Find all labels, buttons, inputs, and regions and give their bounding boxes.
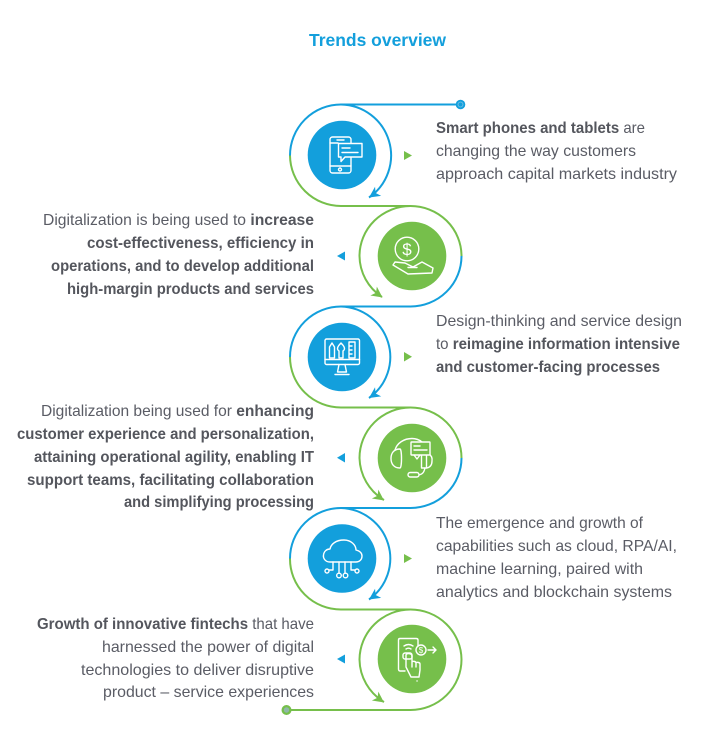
icon: monitor with design tools [308,323,376,391]
start dot [456,100,465,109]
text: digitalization for customer experience [17,403,314,511]
text: smart phones and tablets: Smart phones and tablets are [436,120,645,137]
icon: phone with tap gesture and coin [378,625,446,693]
text: growth of innovative fintechs [37,616,314,701]
text: emergence of capabilities: analytics and blockchain systems [436,584,672,601]
text: digitalization for cost-effectiveness: cost-effectiveness, efficiency in [87,235,314,252]
icon: phone with tap gesture and coin: $ [419,646,424,655]
arrowheads on the flow line [366,187,387,707]
text: design-thinking and service design: to reimagine information intensive [436,336,680,353]
text: smart phones and tablets: changing the way customers [436,143,636,160]
text: digitalization for cost-effectiveness: high-margin products and services [67,281,314,298]
pointer triangles [337,151,412,664]
title: Trends overview [309,30,446,50]
text: design-thinking and service design: Design-thinking and service design [436,313,682,330]
text: digitalization for customer experience: Digitalization being used for enhancing [41,403,314,420]
flow line: serpentine connector [286,104,462,710]
icon: headset with message card [378,424,446,492]
text: design-thinking and service design [436,313,682,376]
end dot [282,705,292,715]
text: emergence of capabilities: capabilities such as cloud, RPA/AI, [436,538,677,555]
text: design-thinking and service design: and customer-facing processes [436,359,660,376]
text: digitalization for customer experience: and simplifying processing [124,494,314,511]
text: emergence of capabilities: machine learning, paired with [436,561,643,578]
text: digitalization for cost-effectiveness: Digitalization is being used to increase [43,212,314,229]
text: digitalization for customer experience: support teams, facilitating collaboration [27,472,314,489]
text: smart phones and tablets [436,120,677,183]
text: emergence of capabilities: The emergence and growth of [436,515,644,532]
text: growth of innovative fintechs: technologies to deliver disruptive [81,662,314,679]
text: emergence of capabilities [436,515,677,601]
text: growth of innovative fintechs: product – service experiences [103,684,314,701]
icon: cloud with circuit lines [308,524,376,593]
text: growth of innovative fintechs: Growth of innovative fintechs that have [37,616,314,633]
text: smart phones and tablets: approach capital markets industry [436,166,677,183]
text: digitalization for cost-effectiveness [43,212,314,298]
text: digitalization for cost-effectiveness: operations, and to develop additional [51,258,314,275]
text: digitalization for customer experience: attaining operational agility, enabling IT [34,449,314,466]
icon: hand holding dollar coin [378,222,446,290]
text: growth of innovative fintechs: harnessed the power of digital [102,639,314,656]
icon: hand holding dollar coin: $ [402,240,412,259]
text: digitalization for customer experience: customer experience and personalization, [17,426,314,443]
icon: phone with chat bubble [308,121,376,189]
